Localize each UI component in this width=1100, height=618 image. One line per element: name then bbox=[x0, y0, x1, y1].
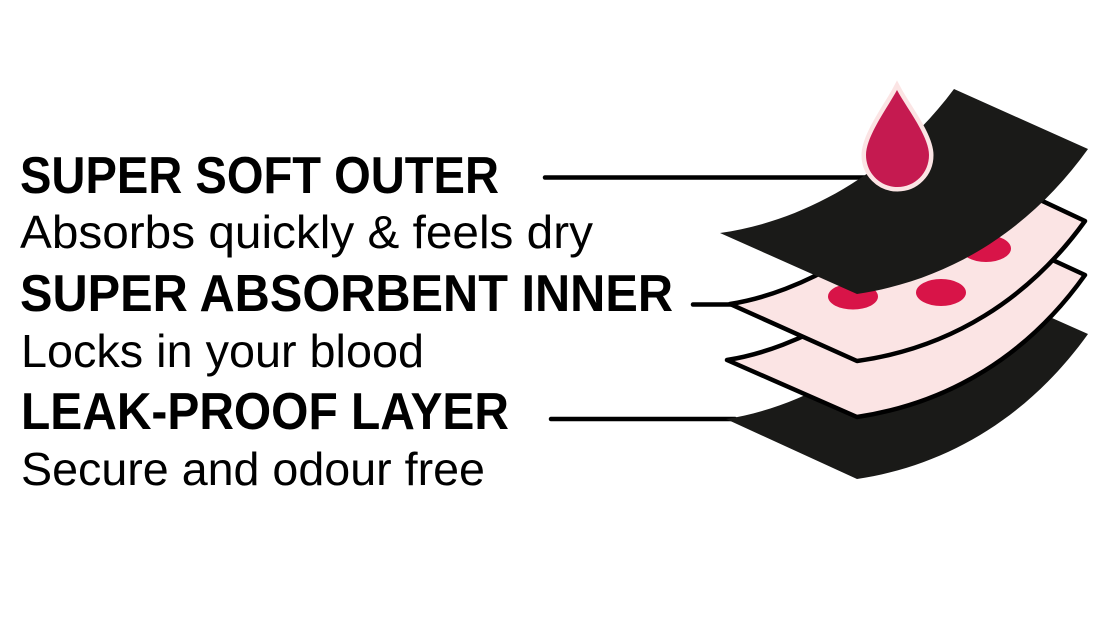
layer: black soft outer sheet bbox=[720, 89, 1088, 294]
layer: upper pink absorbent sheet bbox=[730, 160, 1085, 361]
text block: leak-proof layer bbox=[21, 383, 509, 495]
layer: lower pink sheet bbox=[727, 215, 1085, 417]
icon: blood drop bbox=[866, 90, 929, 187]
heading: leak-proof layer: LEAK-PROOF LAYER bbox=[21, 383, 509, 441]
connector line: absorbent inner layer bbox=[693, 302, 732, 307]
layer: black leak-proof base bbox=[726, 275, 1088, 479]
text block: super soft outer bbox=[20, 147, 593, 258]
connector line: outer layer bbox=[545, 175, 880, 180]
description: super absorbent inner: Locks in your blood bbox=[21, 325, 424, 377]
absorbed blood spots bbox=[828, 235, 1011, 310]
description: leak-proof layer: Secure and odour free bbox=[21, 443, 485, 495]
description: super soft outer: Absorbs quickly & feels dry bbox=[20, 206, 593, 258]
heading: super absorbent inner: SUPER ABSORBENT INNER bbox=[20, 265, 673, 323]
heading: super soft outer: SUPER SOFT OUTER bbox=[20, 147, 499, 205]
text block: super absorbent inner bbox=[20, 265, 673, 377]
connector line: leak-proof layer bbox=[551, 417, 735, 421]
